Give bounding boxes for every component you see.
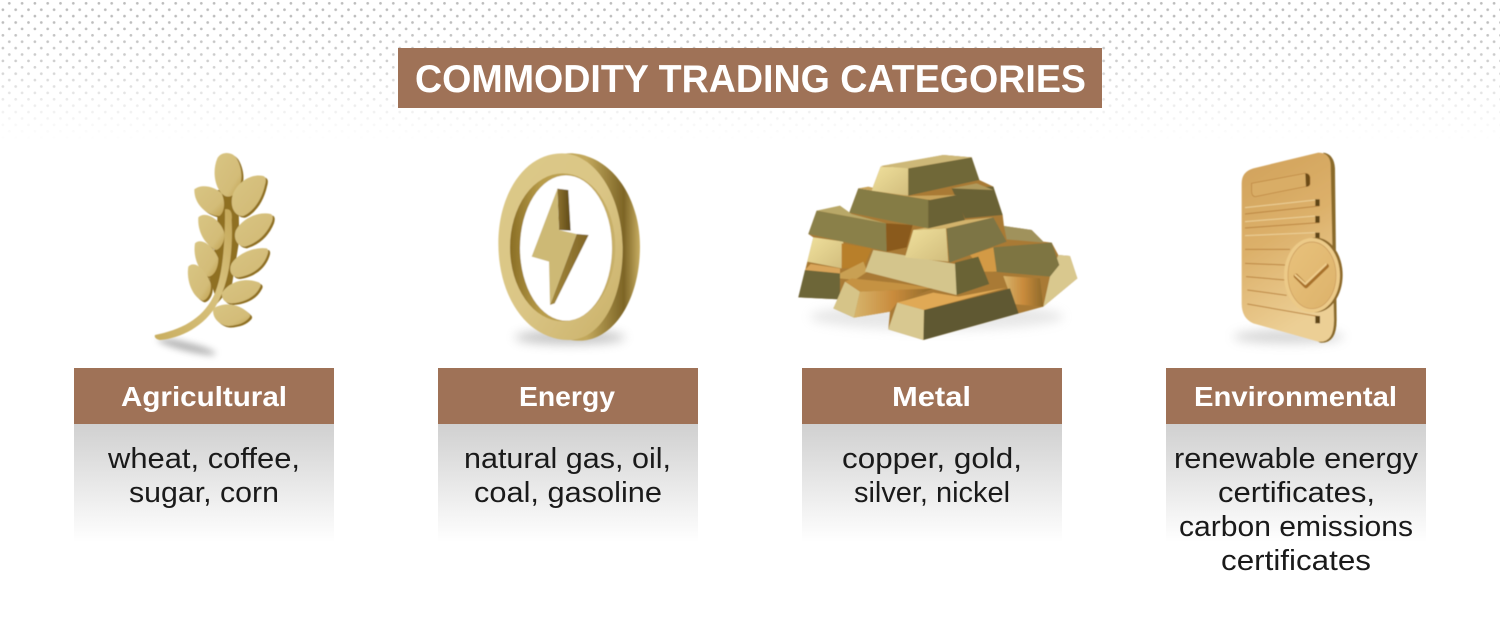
card: environmental: carbon emissions bbox=[1179, 511, 1413, 543]
card: agricultural: sugar, corn bbox=[129, 477, 279, 509]
card: environmental: certificates, bbox=[1218, 477, 1375, 509]
card: metal: copper, gold, bbox=[842, 443, 1022, 475]
title: COMMODITY TRADING CATEGORIES bbox=[415, 58, 1086, 101]
icon: wheat bbox=[155, 153, 275, 358]
icon: certificate document bbox=[1233, 153, 1343, 343]
card: energy: natural gas, oil, bbox=[464, 443, 671, 475]
card: metal bbox=[802, 368, 1062, 542]
icon: lightning bolt bbox=[532, 189, 589, 305]
card: metal: Metal bbox=[892, 381, 971, 412]
icon: gold bars bbox=[798, 155, 1077, 340]
card: agricultural: wheat, coffee, bbox=[107, 443, 300, 475]
card: agricultural bbox=[74, 368, 334, 542]
card: energy: coal, gasoline bbox=[474, 477, 662, 509]
card: energy bbox=[438, 368, 698, 542]
title bbox=[398, 48, 1102, 108]
icon: energy ring with lightning bolt bbox=[498, 153, 640, 344]
card: environmental: certificates bbox=[1221, 545, 1371, 577]
card: agricultural: Agricultural bbox=[121, 381, 287, 412]
card: energy: Energy bbox=[519, 381, 615, 412]
card: metal: silver, nickel bbox=[854, 477, 1010, 509]
icon: check coin bbox=[1284, 238, 1343, 313]
card: environmental: Environmental bbox=[1194, 381, 1397, 412]
card: environmental: renewable energy bbox=[1174, 443, 1419, 475]
card: environmental bbox=[1166, 368, 1426, 577]
